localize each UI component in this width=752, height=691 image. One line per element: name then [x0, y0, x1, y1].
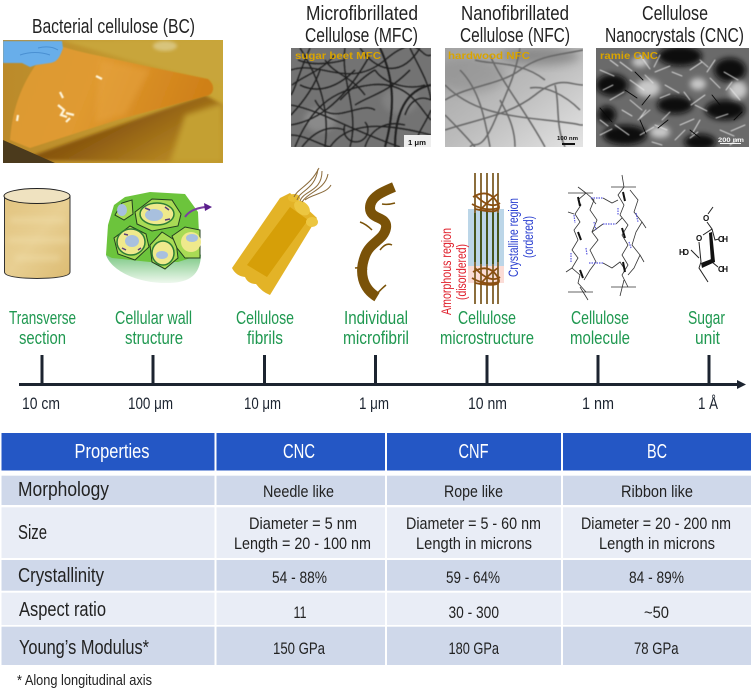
- table: properties of nanocellulose: [2, 433, 751, 665]
- crystalline region highlight: [468, 209, 504, 266]
- label: Transverse section: Transverse: [9, 308, 76, 328]
- caption: ramie CNC: ramie CNC: [600, 50, 658, 62]
- caption: sugar beet MFC: sugar beet MFC: [295, 50, 381, 62]
- scale labels: 100 μm: [128, 394, 173, 413]
- row: Morphology: [2, 476, 751, 505]
- row: Aspect ratio: 30 - 300: [448, 603, 499, 622]
- icon: cellulose fibrils bundle: [232, 168, 331, 295]
- scale labels: 10 cm: [22, 394, 60, 413]
- row: Aspect ratio: ~50: [644, 603, 669, 622]
- label: Sugar unit: unit: [695, 328, 720, 348]
- heading: Bacterial cellulose: Bacterial cellulose (BC): [32, 16, 195, 38]
- cell: lower left: [114, 226, 149, 260]
- heading: Microfibrillated Cellulose: [305, 3, 418, 47]
- table header: CNF: [458, 441, 488, 463]
- label: Transverse section: section: [19, 328, 66, 348]
- row: Morphology: Rope like: [444, 482, 503, 501]
- row: Size: Size: [18, 522, 47, 544]
- diagram: cellulose molecule: [566, 175, 646, 300]
- row: Crystallinity: Crystallinity: [18, 565, 104, 587]
- row: Size: Diameter = 5 - 60 nm: [406, 514, 541, 533]
- label: crystalline region: (ordered): [520, 216, 536, 258]
- row: Crystallinity: [2, 560, 751, 591]
- table header: CNC: [283, 441, 315, 463]
- scale bar: 200 nm: 200 nm: [718, 137, 744, 144]
- row: Aspect ratio: Aspect ratio: [19, 599, 106, 621]
- cell: upper left: [115, 200, 133, 220]
- micrograph: ramie CNC: [596, 46, 749, 150]
- row: Size: Length in microns: [416, 534, 532, 553]
- row: Crystallinity: 59 - 64%: [446, 568, 500, 587]
- scale bar: 100 nm: [557, 136, 578, 145]
- label: Cellulose molecule: [570, 308, 630, 348]
- icon: cellular wall structure: [106, 192, 212, 283]
- label: Cellulose microstructure: [440, 308, 534, 348]
- label: amorphous region: (disordered): [453, 244, 469, 300]
- heading: Cellulose Nanocrystals: Cellulose: [642, 3, 708, 25]
- row: Size: Length = 20 - 100 nm: [234, 534, 371, 553]
- cell: upper centre: [135, 199, 181, 231]
- row: Size: [2, 507, 751, 558]
- footnote: * Along longitudinal axis: [17, 673, 152, 689]
- label: Transverse section: [9, 308, 76, 348]
- row: Young's Modulus: Young’s Modulus*: [19, 637, 149, 659]
- row: Young's Modulus: 78 GPa: [634, 639, 679, 658]
- heading: Nanofibrillated Cellulose: Nanofibrillated: [461, 3, 569, 25]
- heading: Microfibrillated Cellulose: Cellulose (MFC): [305, 25, 418, 47]
- scale bar: 100 nm: 100 nm: [557, 136, 578, 142]
- label: Cellulose molecule: Cellulose: [571, 308, 629, 328]
- row: Young's Modulus: 180 GPa: [448, 639, 499, 658]
- cell: right: [172, 227, 201, 258]
- row: Young's Modulus: [2, 627, 751, 665]
- label: Cellulose fibrils: [236, 308, 294, 348]
- heading: Nanofibrillated Cellulose: Cellulose (NFC): [460, 25, 570, 47]
- scale labels: 1 μm: [359, 394, 389, 413]
- heading: Cellulose Nanocrystals: [605, 3, 744, 47]
- label: Cellulose molecule: molecule: [570, 328, 630, 348]
- label: Cellulose fibrils: fibrils: [247, 328, 283, 348]
- scale labels: 1 Å: [698, 394, 719, 413]
- label: Cellulose microstructure: Cellulose: [458, 308, 516, 328]
- scale labels: 10 nm: [468, 394, 507, 413]
- scale labels: 1 nm: [582, 394, 614, 413]
- micrograph: sugar beet MFC: [291, 46, 431, 147]
- label: Cellulose microstructure: microstructure: [440, 328, 534, 348]
- row: Young's Modulus: 150 GPa: [273, 639, 325, 658]
- diagram: sugar unit: OH: [718, 235, 728, 244]
- label: crystalline region: Crystalline region: [505, 198, 521, 277]
- row: Size: Length in microns: [599, 534, 715, 553]
- scale labels: [22, 394, 719, 413]
- diagram: cellulose microstructure: [438, 173, 536, 315]
- label: amorphous region: Amorphous region: [438, 228, 454, 315]
- row: Morphology: Ribbon like: [621, 482, 693, 501]
- diagram: sugar unit: OH: [718, 265, 728, 274]
- heading: Nanofibrillated Cellulose: [460, 3, 570, 47]
- label: Individual microfibril: Individual: [344, 308, 408, 328]
- scale axis arrow: [19, 355, 746, 389]
- label: Individual microfibril: [343, 308, 409, 348]
- diagram: sugar unit: O: [703, 214, 709, 223]
- label: Cellular wall structure: structure: [125, 328, 183, 348]
- label: Cellulose fibrils: Cellulose: [236, 308, 294, 328]
- micrograph: hardwood NFC: [435, 47, 583, 147]
- row: Size: Diameter = 5 nm: [249, 514, 357, 533]
- row: Crystallinity: 84 - 89%: [629, 568, 684, 587]
- label: Sugar unit: [688, 308, 725, 348]
- diagram: sugar unit: HO: [679, 248, 689, 257]
- icon: individual microfibril: [355, 187, 395, 297]
- caption: hardwood NFC: hardwood NFC: [448, 50, 530, 62]
- amorphous region highlight: [468, 266, 504, 283]
- row: Aspect ratio: [2, 593, 751, 625]
- label: Cellular wall structure: [115, 308, 192, 348]
- label: crystalline region: [505, 198, 536, 277]
- table header: Properties: [74, 441, 150, 463]
- cell: lower centre: [150, 232, 178, 269]
- photo: bacterial cellulose sheet: [3, 40, 223, 163]
- label: Sugar unit: Sugar: [688, 308, 725, 328]
- table header: [2, 433, 751, 470]
- heading: Microfibrillated Cellulose: Microfibrillated: [306, 3, 418, 25]
- scale labels: 10 μm: [244, 394, 281, 413]
- label: Cellular wall structure: Cellular wall: [115, 308, 192, 328]
- table header: BC: [647, 441, 667, 463]
- icon: transverse section cylinder: [4, 188, 70, 278]
- scale bar: 1 µm: 1 μm: [408, 138, 426, 147]
- label: Individual microfibril: microfibril: [343, 328, 409, 348]
- row: Aspect ratio: 11: [294, 603, 306, 622]
- diagram: sugar unit: [679, 207, 728, 282]
- row: Morphology: Morphology: [18, 479, 109, 501]
- label: amorphous region: [438, 228, 469, 315]
- diagram: sugar unit: O: [696, 234, 702, 243]
- row: Morphology: Needle like: [263, 482, 334, 501]
- row: Crystallinity: 54 - 88%: [272, 568, 327, 587]
